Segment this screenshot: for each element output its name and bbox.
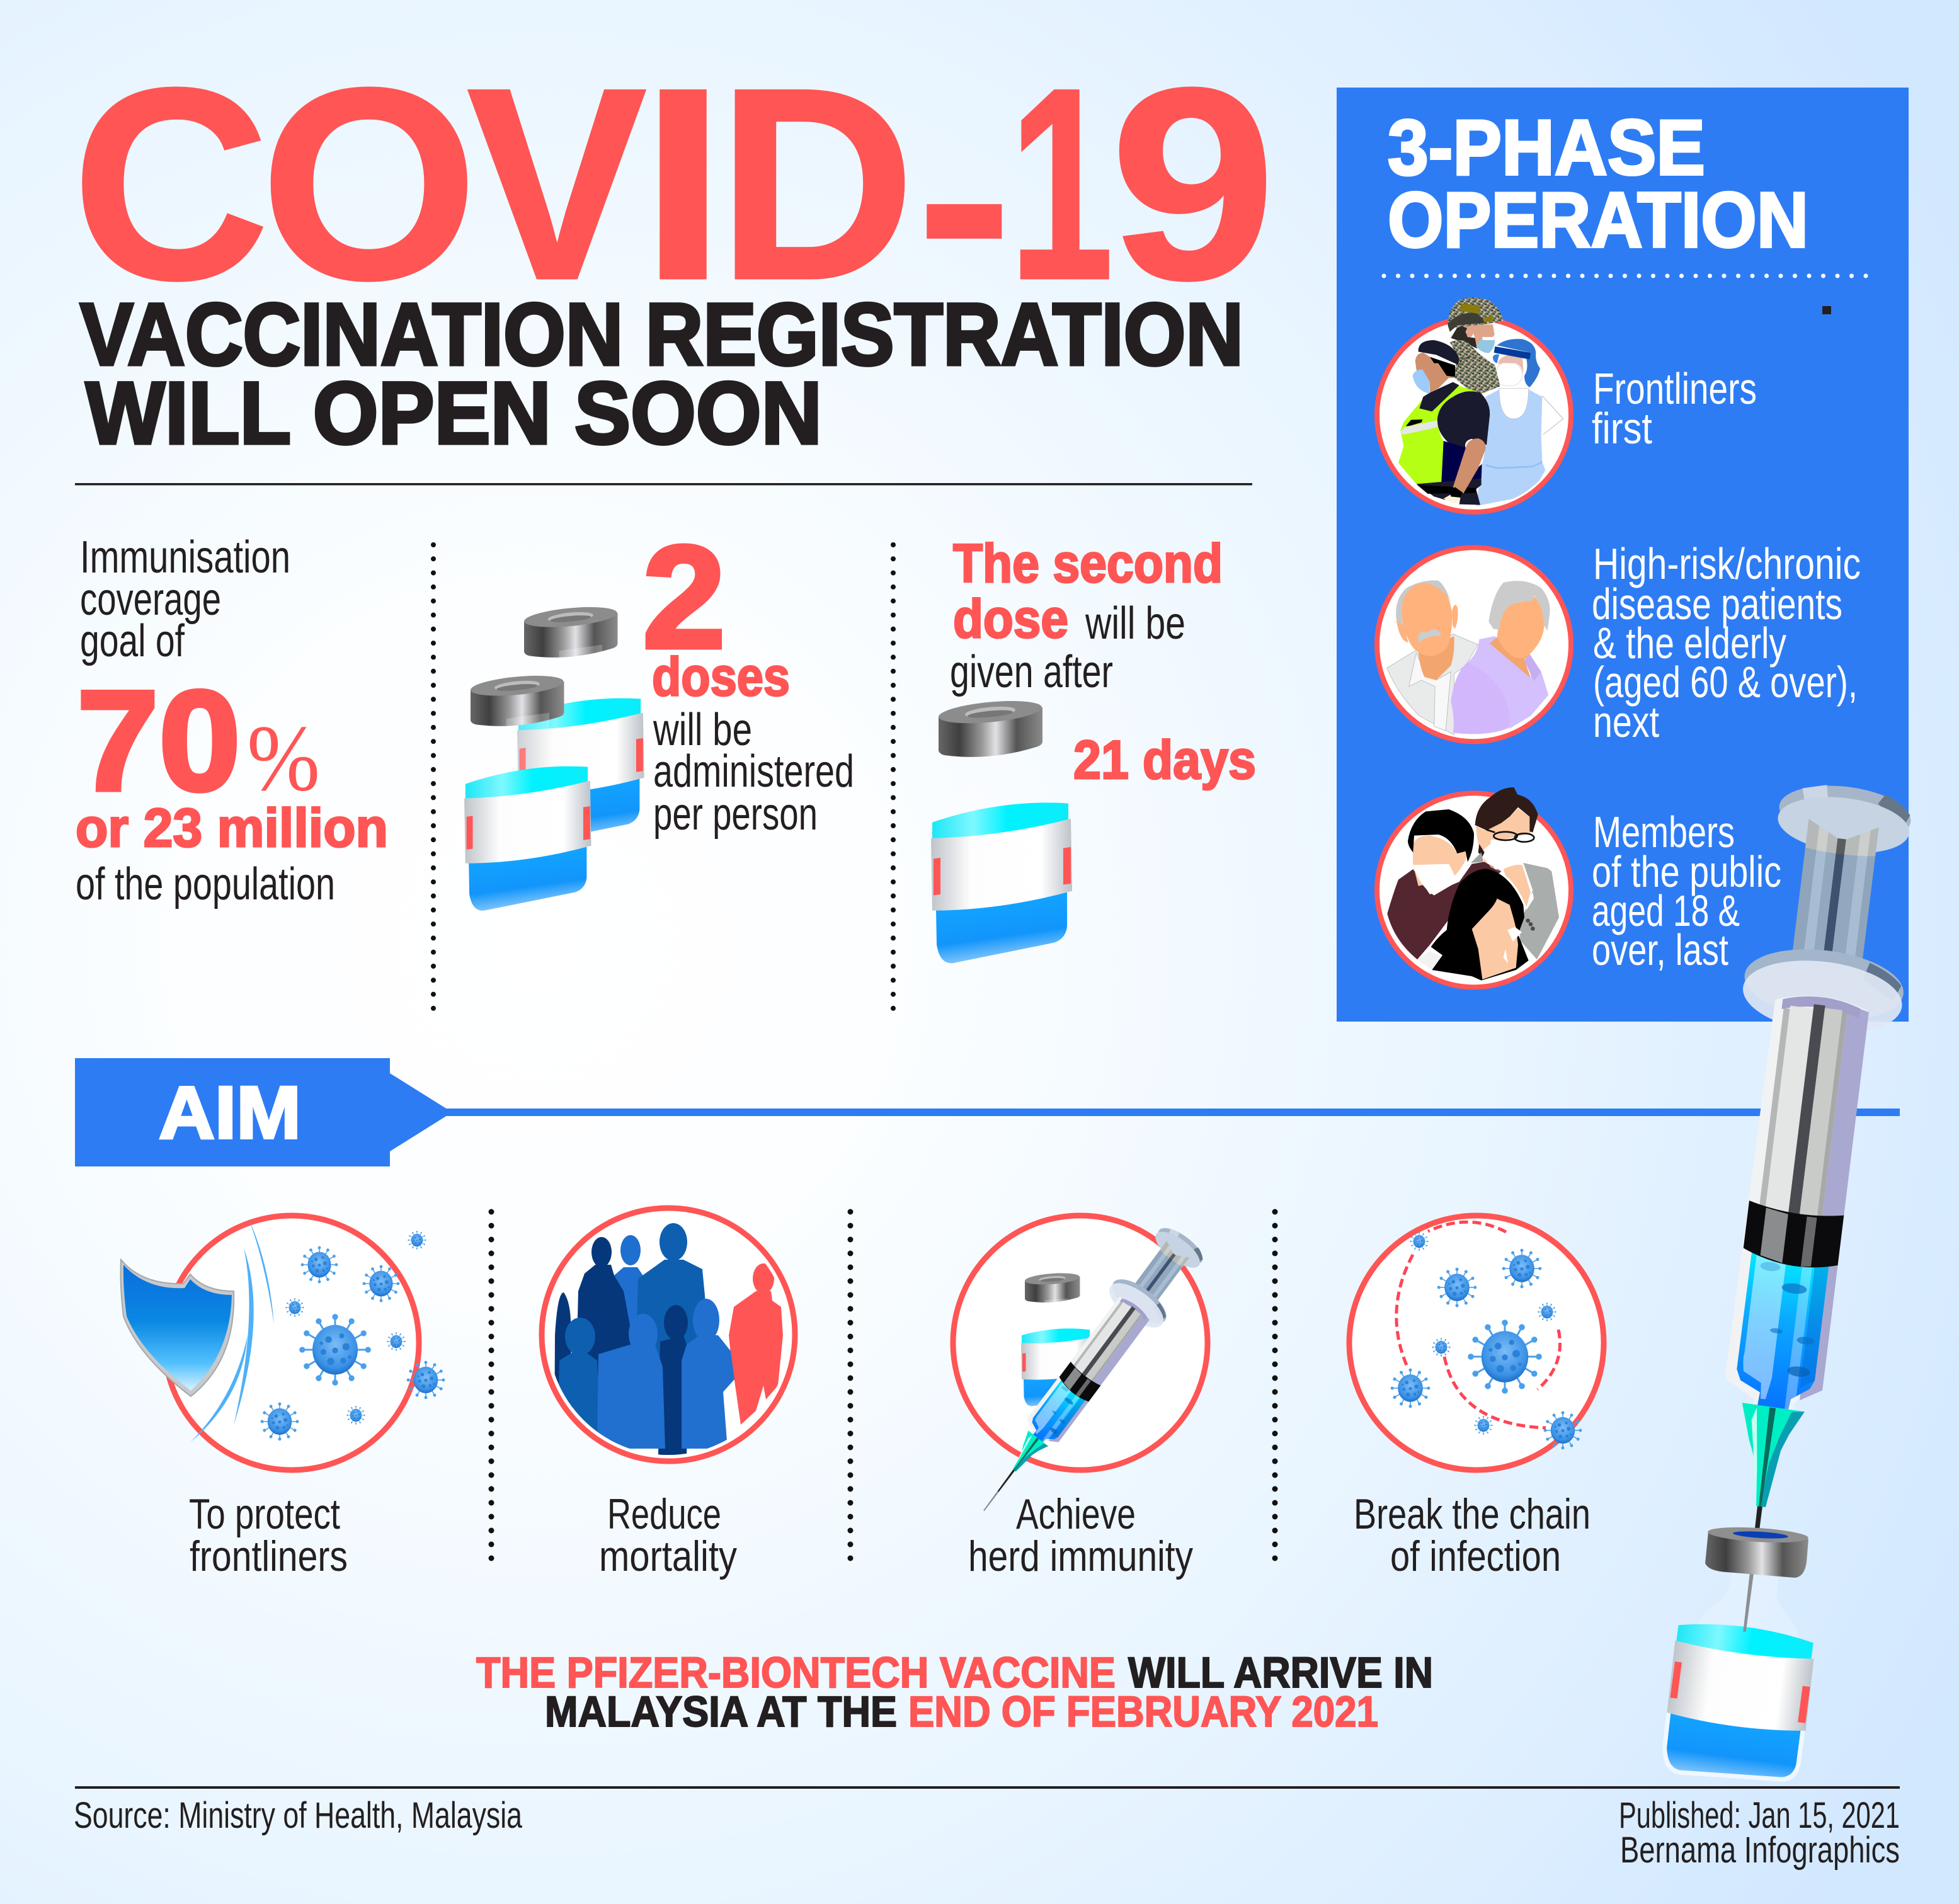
coverage goal block: of the population (76, 859, 335, 909)
caption: herd immunity: herd immunity (968, 1532, 1193, 1580)
title: COVID-19: O (260, 31, 478, 336)
coverage goal block: Immunisation (80, 532, 290, 583)
panel heading (1388, 105, 1808, 264)
second dose text: given after (950, 647, 1113, 697)
caption: reduce mortality (599, 1490, 737, 1580)
label: frontliners first: first (1592, 404, 1652, 453)
AIM banner: AIM (159, 1071, 301, 1154)
two doses text: will be (653, 705, 752, 755)
panel heading: 3-PHASE (1388, 105, 1705, 191)
label: members of the public: of the public (1592, 847, 1781, 896)
caption: herd immunity: Achieve (1016, 1490, 1136, 1538)
single vial illustration (931, 697, 1072, 966)
icon: frontliners (1377, 297, 1571, 512)
title: COVID-19: V (467, 31, 648, 336)
label: members of the public (1592, 807, 1781, 974)
subtitle: WILL OPEN SOON (86, 363, 822, 462)
icon: spreading viruses (1391, 1232, 1582, 1449)
caption: reduce mortality: Reduce (607, 1490, 721, 1538)
arrival statement: MALAYSIA AT THE (545, 1687, 897, 1736)
caption: break the chain: of infection (1390, 1532, 1561, 1580)
label: high-risk group: High-risk/chronic (1593, 539, 1861, 588)
title: COVID-19: C (72, 31, 270, 336)
aim: herd immunity icon (953, 1216, 1213, 1530)
aim: reduce mortality icon (542, 1208, 795, 1461)
label: members of the public: aged 18 & (1592, 886, 1740, 935)
icon: mini syringe (958, 1218, 1213, 1530)
second dose text: The second (953, 533, 1223, 594)
icon: swoosh lines (190, 1219, 274, 1442)
coverage goal block (76, 532, 388, 909)
label: members of the public: Members (1593, 807, 1735, 857)
label: frontliners first: Frontliners (1593, 364, 1757, 413)
arrival statement (476, 1648, 1433, 1736)
title: COVID-19: D (717, 31, 915, 336)
caption: to protect frontliners (189, 1490, 348, 1580)
second dose text: dose (953, 589, 1068, 649)
label: high-risk group: disease patients (1592, 579, 1842, 629)
arrival statement: WILL ARRIVE IN (1128, 1648, 1433, 1697)
two doses text: per person (653, 789, 818, 840)
two doses text (643, 516, 854, 840)
caption: break the chain (1354, 1490, 1591, 1580)
title: COVID-19: 1 (1009, 31, 1114, 336)
two doses text: 2 (643, 516, 726, 679)
title: COVID-19: - (917, 45, 1012, 350)
caption: reduce mortality: mortality (599, 1532, 737, 1580)
caption: break the chain: Break the chain (1354, 1490, 1591, 1538)
back row people (554, 1223, 715, 1449)
published credit (1619, 1795, 1900, 1871)
arrival statement: END OF FEBRUARY 2021 (908, 1687, 1378, 1736)
icon: viruses (261, 1231, 445, 1440)
vial cap pierced by needle (1705, 1525, 1809, 1578)
title: COVID-19: I (640, 31, 726, 336)
coverage goal block: 70 (77, 661, 241, 820)
subtitle: VACCINATION REGISTRATION (80, 285, 1243, 384)
icon: members of the public (1377, 787, 1571, 987)
two doses text: administered (653, 746, 854, 797)
two doses text: doses (652, 647, 790, 707)
subtitle (80, 285, 1243, 462)
front row people (557, 1299, 734, 1455)
aim: protect frontliners icon (121, 1216, 445, 1470)
icon: shield (121, 1260, 234, 1396)
label: high-risk group (1592, 539, 1861, 746)
icon: dashed infection paths (1396, 1222, 1560, 1428)
caption: herd immunity (968, 1490, 1193, 1580)
coverage goal block: % (247, 706, 320, 811)
large syringe (1665, 777, 1928, 1641)
icon: elderly patients (1377, 547, 1571, 741)
title: COVID-19: 9 (1110, 31, 1276, 336)
label: high-risk group: next (1593, 697, 1659, 746)
caption: to protect frontliners: To protect (189, 1490, 340, 1538)
label: high-risk group: & the elderly (1593, 619, 1786, 668)
aim: break the chain icon (1349, 1216, 1604, 1470)
AIM banner (75, 1058, 1900, 1166)
two vials illustration (464, 604, 644, 913)
second dose text: will be (1085, 598, 1185, 649)
arrival statement: THE PFIZER-BIONTECH VACCINE (476, 1648, 1116, 1697)
coverage goal block: or 23 million (76, 798, 388, 858)
second dose text: 21 days (1073, 730, 1256, 790)
caption: to protect frontliners: frontliners (190, 1532, 348, 1580)
coverage goal block: coverage (80, 574, 221, 625)
source: Source: Ministry of Health, Malaysia (74, 1795, 523, 1836)
label: members of the public: over, last (1592, 925, 1728, 974)
label: frontliners first (1592, 364, 1757, 453)
coverage goal block: goal of (80, 616, 185, 666)
panel heading: OPERATION (1388, 177, 1808, 264)
second dose text (950, 533, 1256, 790)
label: high-risk group: (aged 60 & over), (1593, 658, 1858, 707)
red person (729, 1263, 783, 1425)
large vial (1658, 1559, 1825, 1790)
panel: 3-phase operation (1337, 88, 1909, 1022)
